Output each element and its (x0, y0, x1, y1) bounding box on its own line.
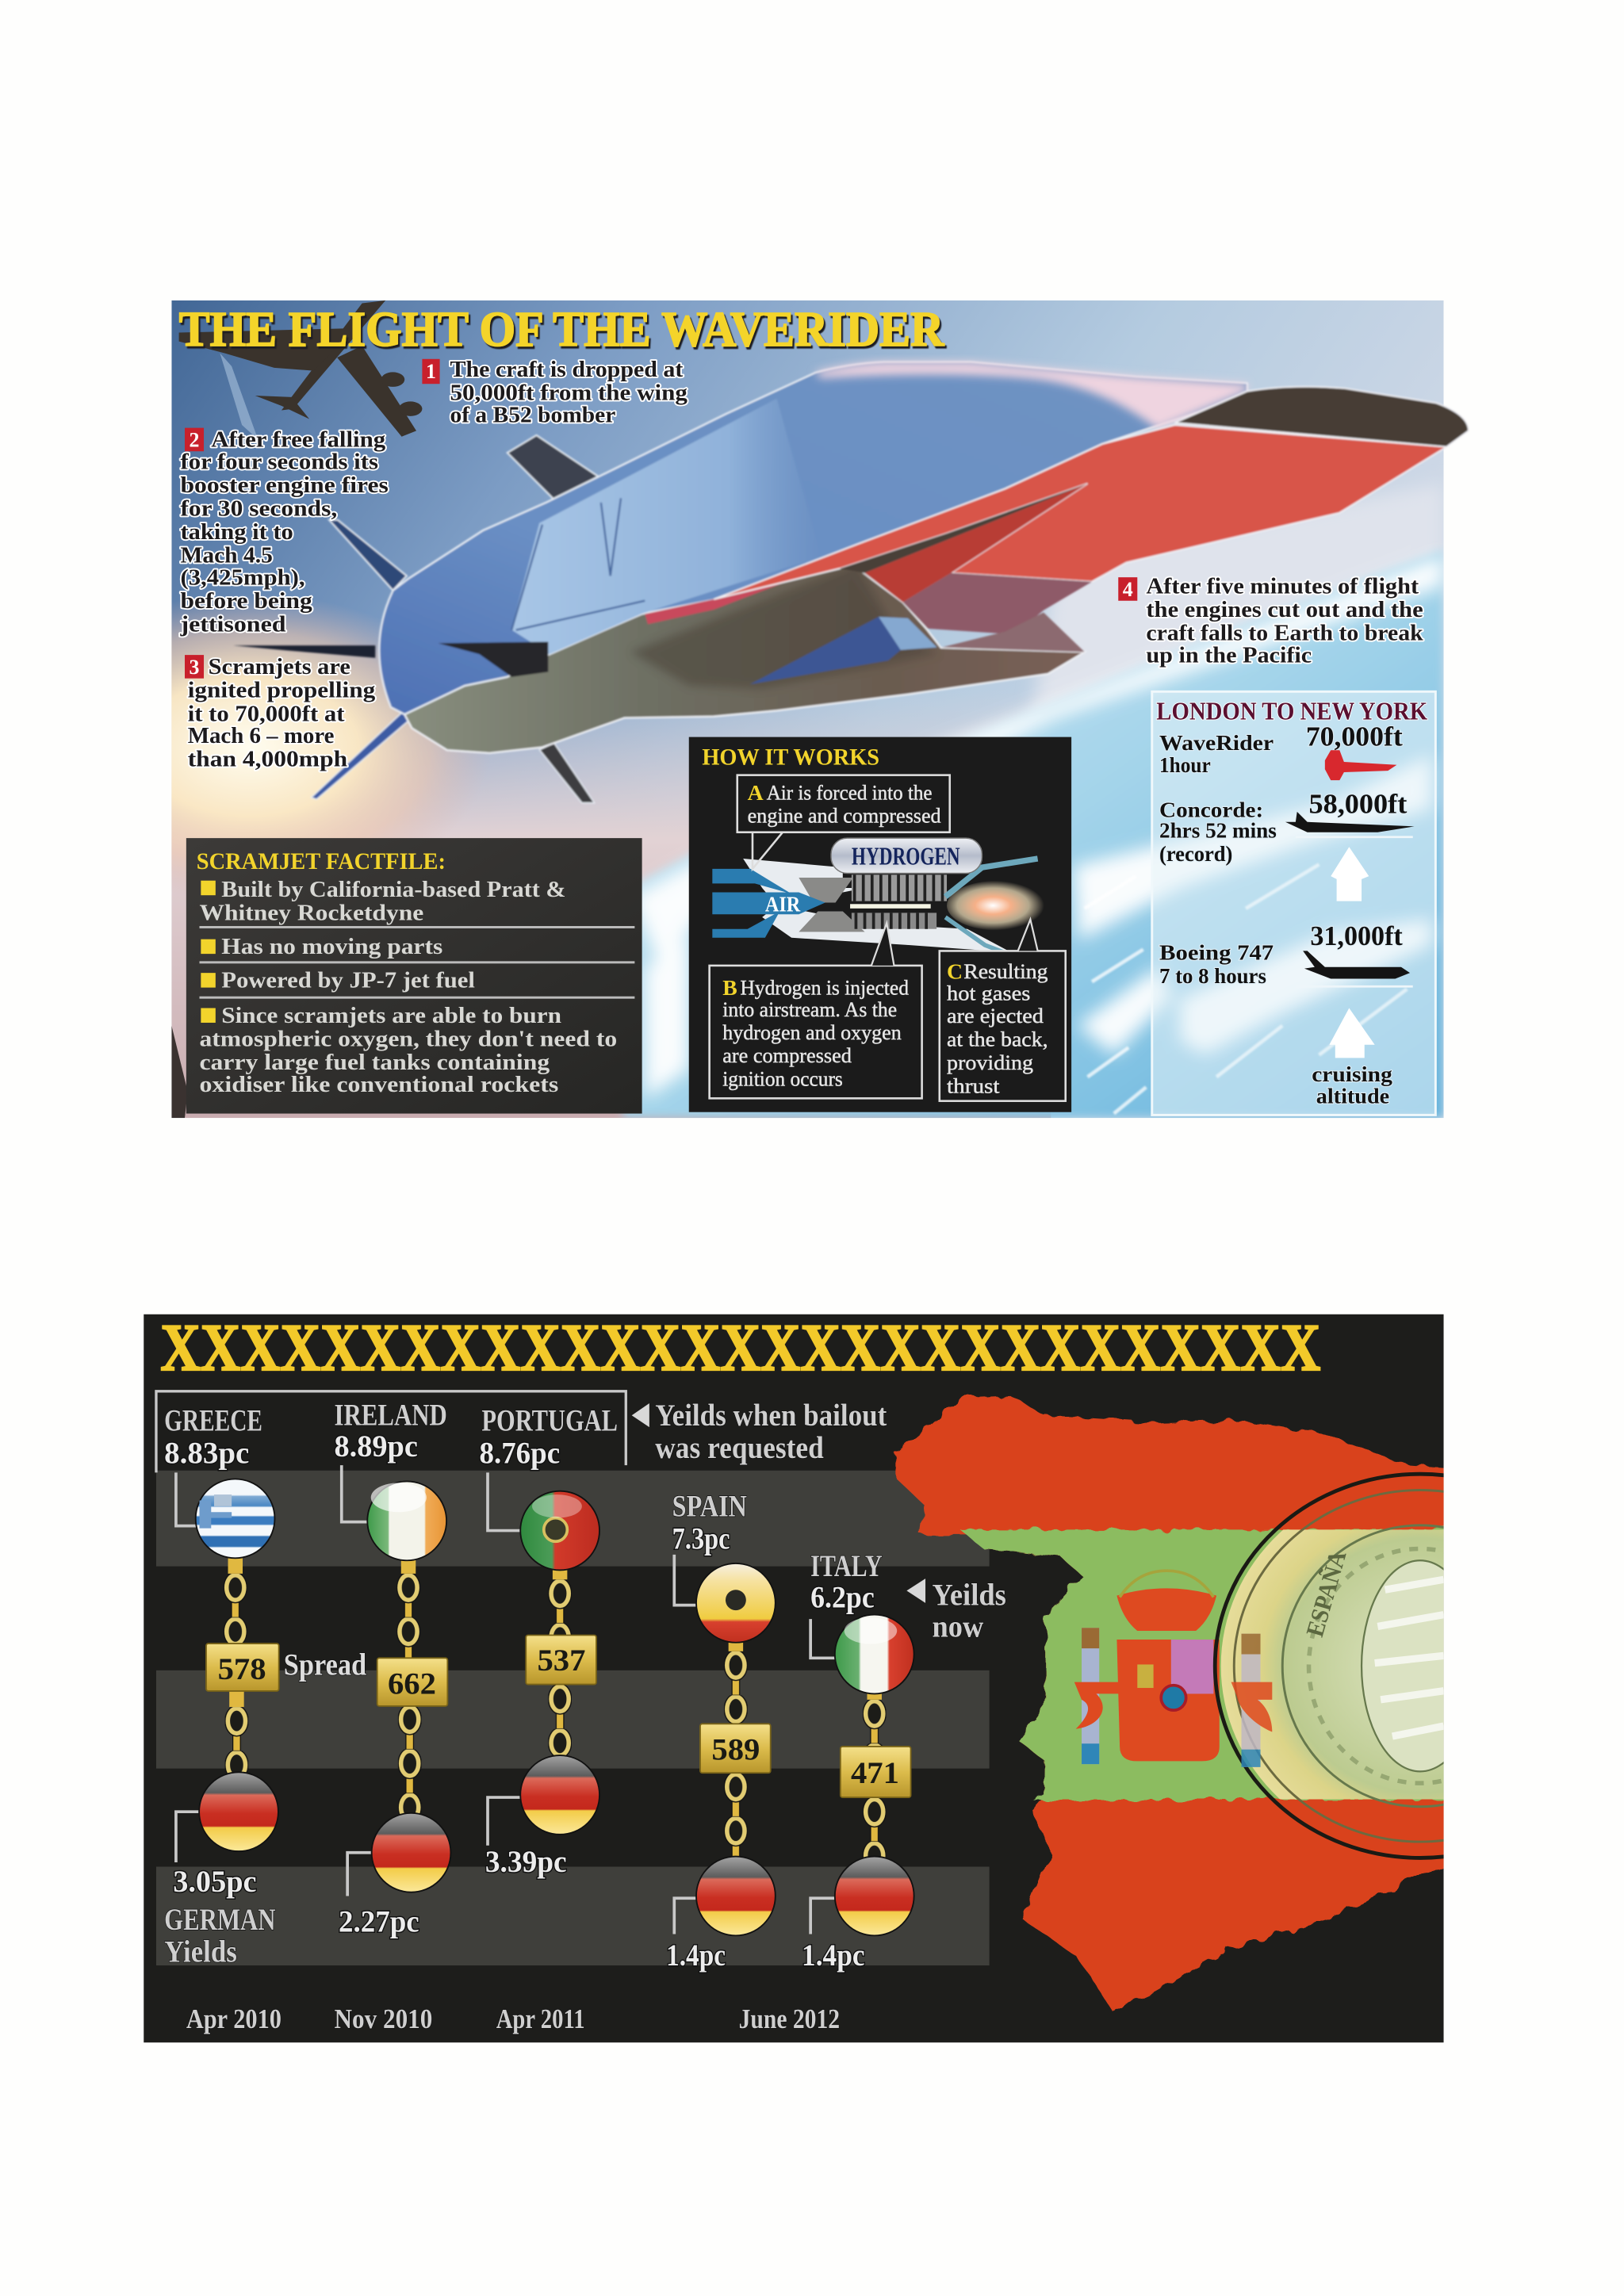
red underside (714, 425, 1446, 599)
German yield values: GERMAN (164, 1903, 276, 1937)
spread value 589: 589 (711, 1733, 760, 1767)
step 2: taking it to (180, 519, 293, 545)
column: Portugal (479, 1404, 618, 1570)
panel: scramjet factfile: Has no moving parts (221, 934, 442, 959)
map of Spain with flag (893, 1394, 1444, 2011)
spread value 662 (377, 1658, 447, 1706)
right pillar and ribbon showing over coin (1231, 1634, 1272, 1767)
step 2: before being (180, 588, 313, 614)
date axis labels: Nov 2010 (335, 2003, 432, 2034)
dark background (144, 1314, 1444, 2042)
German yield values: Yields (164, 1935, 237, 1969)
diagram: scramjet engine (712, 838, 1049, 952)
callout A: A (748, 780, 764, 805)
title: THE FLIGHT OF THE WAVERIDER (179, 301, 944, 357)
callout C: thrust (947, 1074, 1000, 1098)
note: yields when bailout requested (632, 1399, 887, 1465)
column: Spain: 7.3pc (672, 1521, 730, 1556)
icon: B52 bomber silhouette (179, 300, 422, 437)
callout A: Air is forced into the (767, 780, 933, 804)
maroon lower wedge (903, 573, 1092, 634)
German yield values: 1.4pc (802, 1938, 865, 1973)
step 3: it to 70,000ft at (188, 701, 345, 726)
spread value 537 (526, 1635, 596, 1685)
date axis labels: June 2012 (739, 2003, 840, 2034)
column: Greece: 8.83pc (164, 1437, 249, 1471)
panel: bond yields chart (144, 1314, 1444, 2042)
red edge strip (645, 544, 859, 624)
boeing 747 entry (1159, 920, 1413, 1058)
step 4: craft falls to Earth to break (1146, 621, 1423, 646)
callout C: Resulting (963, 959, 1048, 983)
step 2: for 30 seconds, (180, 496, 337, 522)
icon: euro coin: ESPAÑA (1300, 1548, 1352, 1640)
concorde entry: 2hrs 52 mins (1159, 818, 1277, 843)
step 2: Mach 4.5 (180, 543, 273, 568)
callout A (737, 775, 950, 869)
waverider entry: 1hour (1159, 752, 1211, 777)
German yield values (164, 1845, 865, 1973)
spread label: Spread (284, 1647, 367, 1682)
callout B: hydrogen and oxygen (722, 1020, 902, 1044)
panel: London to New York (1152, 691, 1435, 1115)
callout B: B (722, 975, 737, 1000)
step 3: Mach 6 – more (188, 723, 335, 748)
date axis labels: Apr 2011 (496, 2003, 585, 2034)
column: Portugal: 8.76pc (479, 1437, 560, 1471)
step 2 (179, 427, 389, 637)
panel: flight of the waverider (171, 300, 1469, 1118)
lower hull (404, 544, 1085, 753)
column: Greece: GREECE (164, 1404, 262, 1438)
grey bands (156, 1471, 990, 1965)
panel: scramjet factfile (186, 838, 642, 1114)
panel: how it works: HOW IT WORKS (702, 745, 879, 771)
column: Spain: SPAIN (672, 1489, 747, 1523)
panel: London to New York: LONDON TO NEW YORK (1156, 697, 1428, 725)
spread value 578: 578 (218, 1652, 266, 1686)
icon: air flow (712, 869, 825, 938)
step 3: 3 (190, 656, 200, 679)
panel: scramjet factfile: Since scramjets are able to burn (221, 1003, 561, 1028)
waverider entry: WaveRider (1159, 730, 1274, 755)
note: yields now (906, 1578, 1006, 1644)
note: yields now: now (933, 1609, 983, 1644)
cruising altitude label (1312, 1062, 1392, 1108)
callout B (710, 923, 922, 1098)
step 4: the engines cut out and the (1146, 597, 1423, 622)
step 1: 1 (426, 360, 436, 383)
bailout bracket (156, 1391, 626, 1472)
callout B: Hydrogen is injected (740, 976, 910, 1000)
fins (329, 520, 407, 591)
step 3: Scramjets are (209, 654, 350, 679)
German yield values: 3.39pc (485, 1845, 567, 1879)
panel: scramjet factfile: atmospheric oxygen, they don't need to (199, 1027, 617, 1052)
callout C: at the back, (947, 1027, 1048, 1051)
panel: scramjet factfile: oxidiser like conventional rockets (199, 1072, 558, 1097)
column: Italy: 6.2pc (810, 1580, 875, 1614)
column: Ireland (335, 1398, 447, 1560)
step 2: 2 (190, 429, 199, 452)
note: yields now: Yeilds (933, 1578, 1006, 1613)
step 2: (3,425mph), (180, 564, 305, 590)
step 3 (185, 654, 376, 772)
step 1: The craft is dropped at (450, 357, 684, 382)
blue intake (750, 617, 937, 684)
German yield values: 3.05pc (173, 1865, 257, 1899)
icon: hydrogen tank (831, 838, 982, 873)
step 1 (422, 357, 688, 427)
date axis labels (186, 2003, 840, 2034)
icon: euro coin (1213, 1471, 1444, 1860)
leader lines (176, 1465, 836, 1934)
callout C: C (947, 959, 963, 984)
pink highlight on leading edge (815, 362, 1247, 429)
craft markings (511, 498, 645, 630)
callout B: are compressed (722, 1043, 852, 1067)
step 1: 50,000ft from the wing (450, 381, 688, 406)
cruising altitude label: cruising (1312, 1062, 1392, 1086)
step 3: ignited propelling (188, 678, 376, 703)
illustration: scramjet aircraft (233, 362, 1469, 803)
sky and earth background (171, 300, 1443, 1118)
icon: hydrogen tank: HYDROGEN (852, 842, 960, 870)
cruising altitude label: altitude (1316, 1084, 1389, 1108)
German balls (199, 1755, 914, 1935)
column: Italy: ITALY (810, 1549, 883, 1583)
callout B: into airstream. As the (722, 997, 897, 1021)
panel: scramjet factfile: Built by California-based Pratt & (221, 877, 566, 902)
step 2: booster engine fires (180, 473, 389, 498)
waverider entry (1159, 721, 1403, 780)
chains (224, 1553, 887, 1862)
step 4: 4 (1123, 578, 1133, 601)
top blue surface (379, 362, 1247, 714)
German yield values: 1.4pc (666, 1938, 726, 1973)
spread value 578 (206, 1644, 279, 1691)
callout C: providing (947, 1050, 1033, 1074)
German yield values: 2.27pc (339, 1905, 419, 1939)
callout B: ignition occurs (722, 1066, 843, 1090)
waverider entry: 70,000ft (1306, 721, 1403, 752)
spread value 537: 537 (537, 1644, 585, 1678)
callout C: hot gases (947, 981, 1030, 1004)
spread value 471: 471 (851, 1756, 899, 1790)
step 3: than 4,000mph (188, 747, 347, 772)
step 4 (1118, 573, 1423, 668)
spread value 471 (841, 1747, 911, 1797)
icon: coat of arms (1074, 1571, 1220, 1764)
step 4: After five minutes of flight (1146, 573, 1419, 599)
step 4: up in the Pacific (1146, 642, 1312, 668)
concorde entry: 58,000ft (1309, 789, 1408, 820)
panel: scramjet factfile: Powered by JP-7 jet fuel (221, 968, 475, 993)
column: Portugal: PORTUGAL (481, 1404, 618, 1438)
date axis labels: Apr 2010 (186, 2003, 282, 2034)
diagram: scramjet engine: AIR (765, 892, 801, 916)
note: yields when bailout requested: Yeilds when bailout (655, 1399, 887, 1433)
column: Greece (164, 1404, 274, 1558)
note: yields when bailout requested: was requested (655, 1431, 824, 1465)
panel: scramjet factfile: carry large fuel tanks containing (199, 1050, 550, 1075)
nose (1175, 387, 1469, 447)
light panel (511, 399, 821, 654)
spread value 662: 662 (388, 1667, 436, 1701)
column: Ireland: IRELAND (335, 1398, 447, 1432)
panel: scramjet factfile: Whitney Rocketdyne (199, 901, 423, 926)
callout C: are ejected (947, 1004, 1044, 1027)
inner dark intake wedge (840, 484, 1087, 573)
boeing 747 entry: 31,000ft (1310, 920, 1403, 951)
spread value 589 (700, 1724, 771, 1773)
step 2: jettisoned (179, 612, 286, 637)
boeing 747 entry: 7 to 8 hours (1159, 963, 1266, 988)
concorde entry: (record) (1159, 841, 1232, 866)
concorde entry: Concorde: (1159, 798, 1263, 822)
boeing 747 entry: Boeing 747 (1159, 940, 1274, 965)
callout A: engine and compressed (748, 804, 941, 828)
callout C (940, 920, 1066, 1101)
panel: scramjet factfile: SCRAMJET FACTFILE: (197, 849, 446, 874)
small side wing (439, 641, 548, 677)
concorde entry (1159, 789, 1415, 901)
step 1: of a B52 bomber (450, 402, 616, 427)
column: Ireland: 8.89pc (335, 1429, 418, 1464)
column: Spain (672, 1489, 776, 1643)
panel: how it works (689, 737, 1071, 1112)
title of X characters: XXXXXXXXXXXXXXXXXXXXXXXXXXXXX (160, 1311, 1320, 1385)
step 2: for four seconds its (180, 449, 378, 474)
column: Italy (810, 1549, 914, 1693)
step 2: After free falling (211, 427, 386, 453)
